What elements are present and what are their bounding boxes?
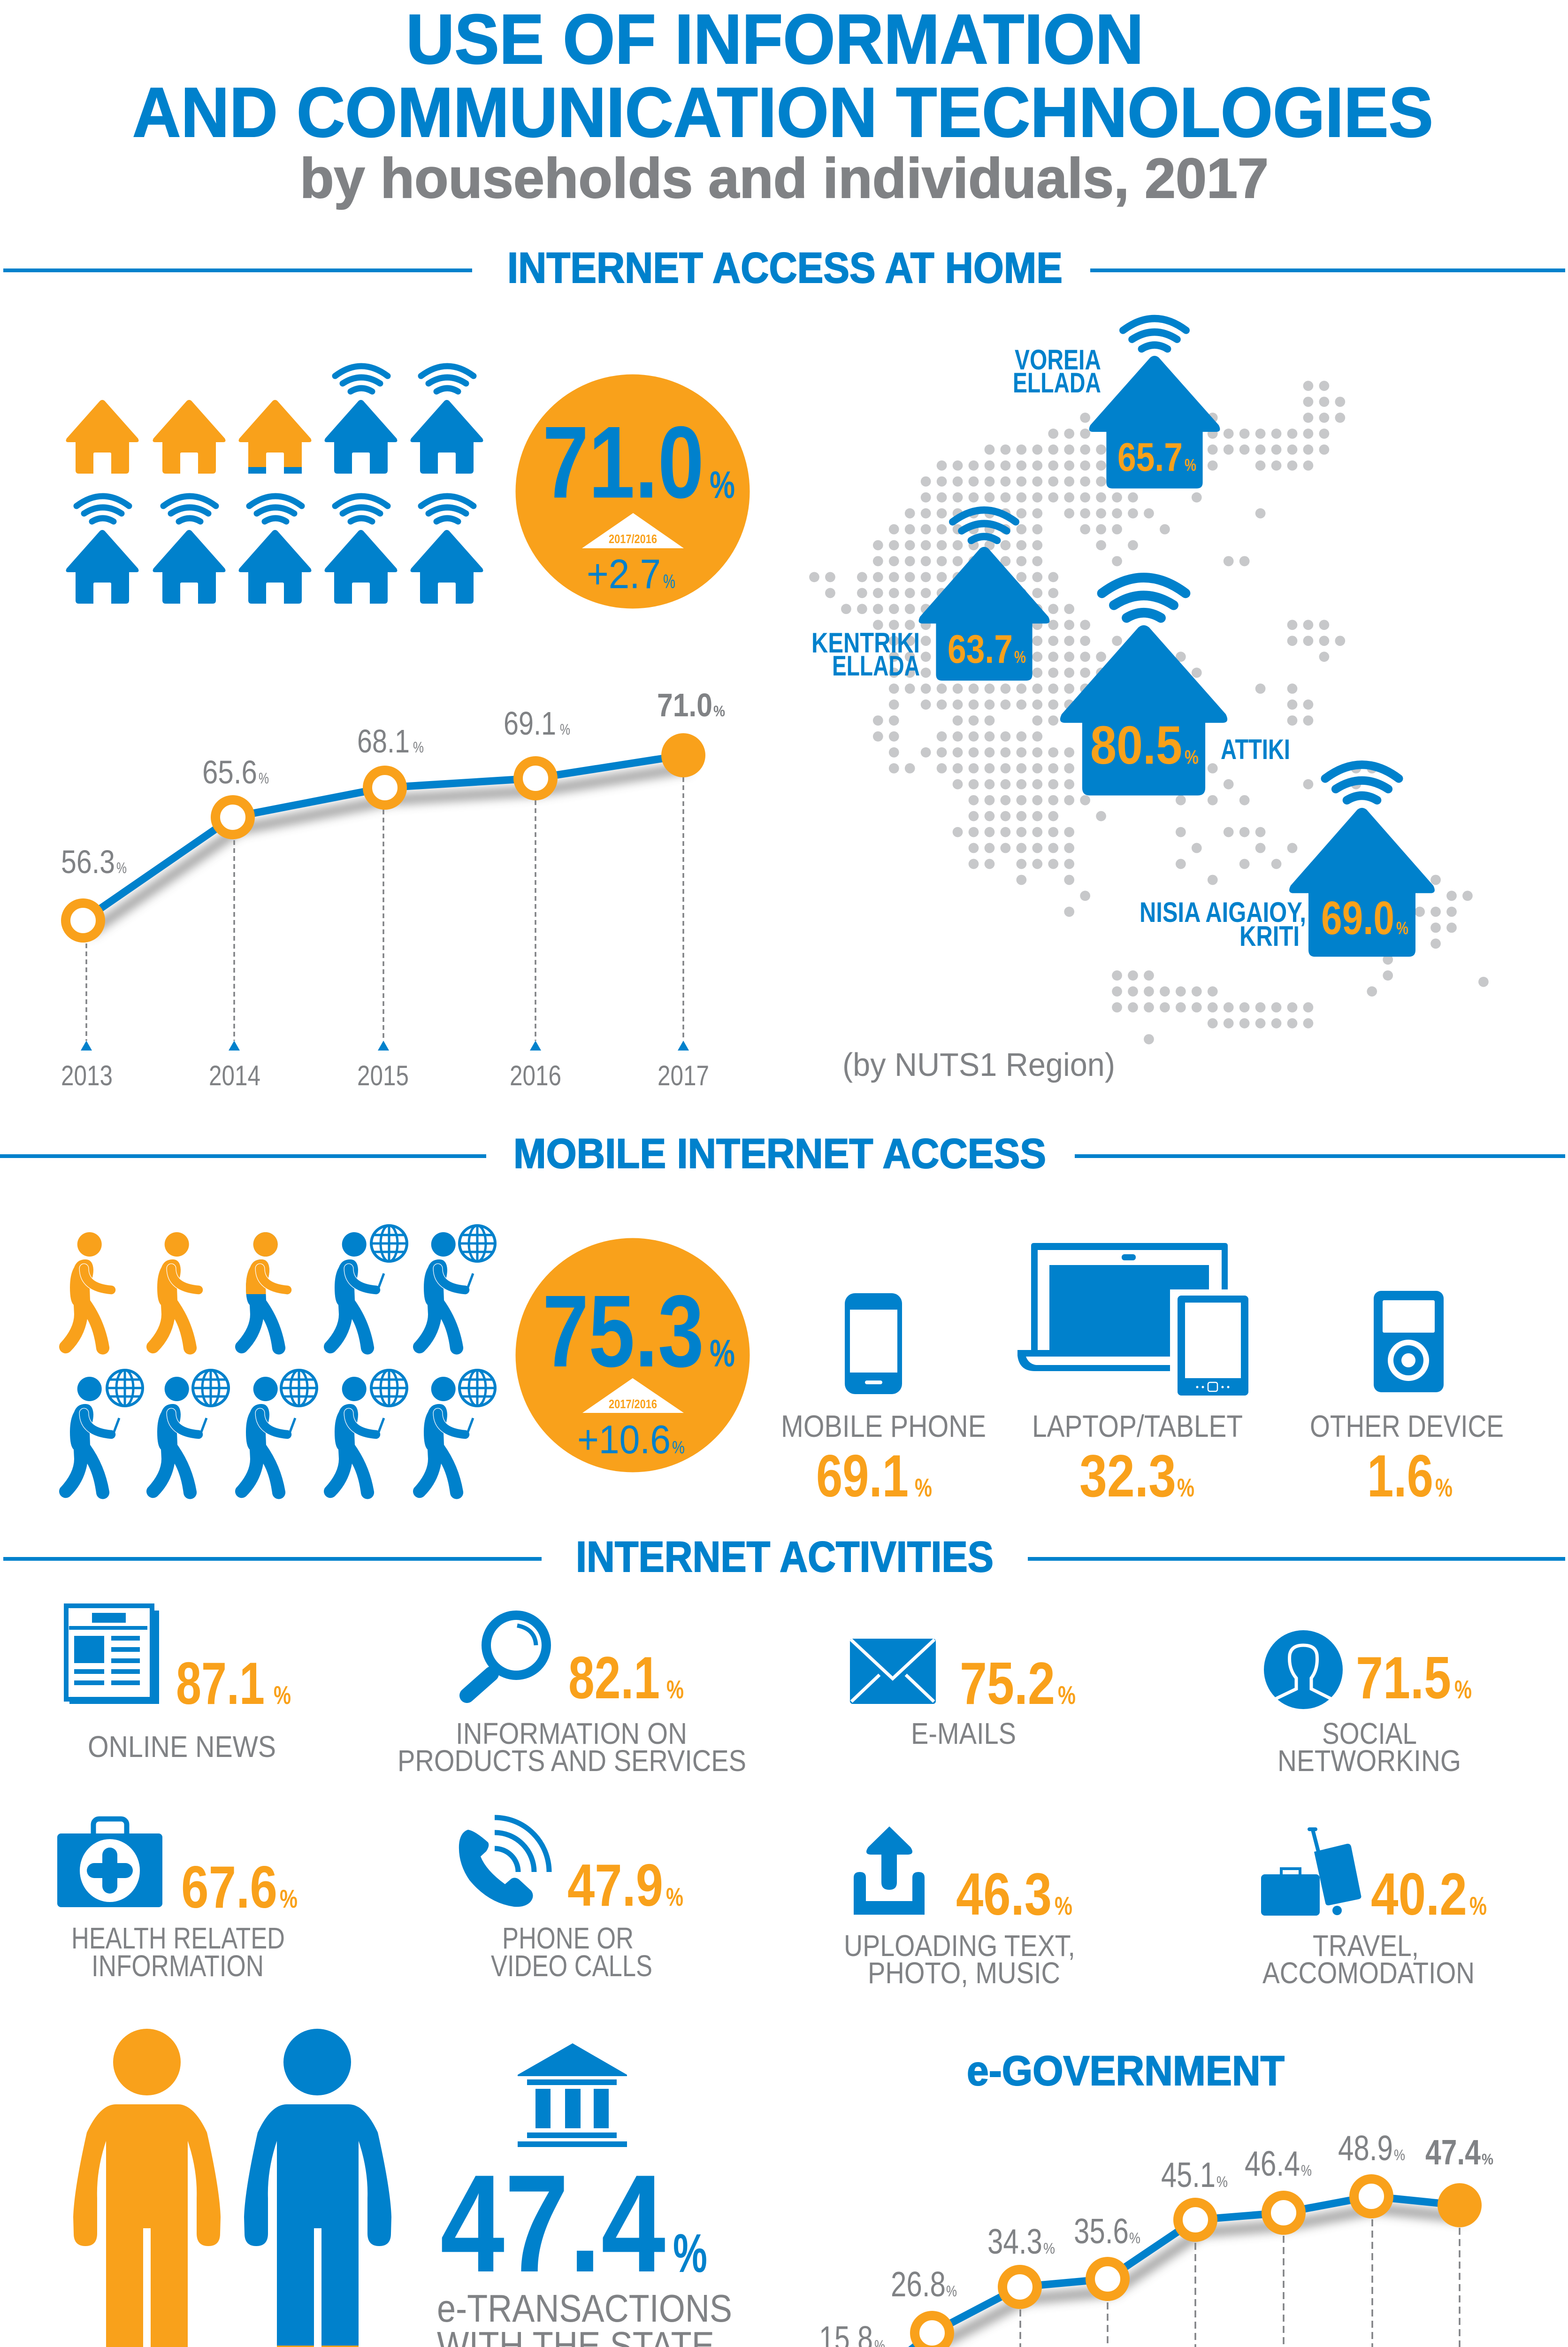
title: AND COMMUNICATION TECHNOLOGIES xyxy=(132,73,1433,152)
line chart: internet access 2013-2017: 68.1 xyxy=(357,723,410,759)
section heading: mobile internet access xyxy=(0,1130,1565,1177)
line chart: internet access 2013-2017 xyxy=(61,687,725,1091)
activity: information on products and services: PRODUCTS AND SERVICES xyxy=(398,1744,746,1778)
line chart: internet access 2013-2017: % xyxy=(713,703,725,720)
device: other device xyxy=(1310,1291,1504,1509)
callout: 71.0%: 2017/2016 xyxy=(609,532,657,546)
region: Nisia Aigaioy, Kriti: 69.0 xyxy=(1321,892,1394,944)
activity: information on products and services: % xyxy=(666,1675,684,1704)
activity: information on products and services: INFORMATION ON xyxy=(456,1717,687,1750)
line chart: internet access 2013-2017: 2016 xyxy=(510,1060,561,1091)
line chart: e-government 2010-2017 xyxy=(819,2128,1493,2347)
region: Kentriki Ellada: ELLADA xyxy=(832,650,920,682)
activity: online news: ONLINE NEWS xyxy=(88,1730,276,1764)
device: other device: 1.6 xyxy=(1367,1442,1433,1509)
line chart: internet access 2013-2017: 69.1 xyxy=(504,705,556,742)
line chart: internet access 2013-2017: 2013 xyxy=(61,1060,113,1091)
line chart: e-government 2010-2017: 48.9 xyxy=(1338,2128,1393,2168)
activity: uploading xyxy=(844,1826,1075,1990)
activity: phone or video calls: 47.9 xyxy=(567,1852,663,1918)
activity: travel, accommodation: % xyxy=(1469,1891,1487,1920)
region: Nisia Aigaioy, Kriti: % xyxy=(1396,919,1408,938)
device: laptop and tablet: LAPTOP/TABLET xyxy=(1032,1409,1243,1443)
region: Voreia Ellada xyxy=(1013,319,1220,489)
pictogram: two people, e-transactions share xyxy=(73,2029,391,2347)
pictogram: ten houses, seven connected xyxy=(66,366,483,604)
activity: e-mails: E-MAILS xyxy=(911,1717,1016,1750)
region: Voreia Ellada: VOREIA xyxy=(1015,344,1101,376)
callout: 71.0% xyxy=(515,375,750,608)
callout: 75.3%: % xyxy=(710,1332,735,1375)
region: Voreia Ellada: % xyxy=(1185,455,1196,475)
activity: travel, accommodation: 40.2 xyxy=(1371,1861,1467,1927)
activity: health related information: % xyxy=(280,1884,298,1913)
callout: 75.3%: % xyxy=(672,1438,685,1457)
region: Nisia Aigaioy, Kriti: NISIA AIGAIOY, xyxy=(1140,897,1306,928)
callout: 75.3%: 75.3 xyxy=(543,1274,704,1388)
device: other device: % xyxy=(1435,1473,1453,1502)
region: Attiki xyxy=(1060,578,1290,796)
line chart: e-government 2010-2017: % xyxy=(1129,2230,1140,2247)
callout: 71.0%: +2.7 xyxy=(587,551,661,597)
activity: e-mails: % xyxy=(1058,1680,1076,1710)
region: Attiki: % xyxy=(1185,746,1199,768)
activity: information on products and services xyxy=(398,1615,746,1778)
section heading: internet activities: INTERNET ACTIVITIES xyxy=(576,1533,994,1581)
callout: 75.3%: +10.6 xyxy=(577,1418,671,1462)
e-transactions figure: 47.4 xyxy=(440,2146,666,2301)
heading: e-government: e-GOVERNMENT xyxy=(967,2047,1285,2094)
line chart: internet access 2013-2017: 2014 xyxy=(209,1060,260,1091)
line chart: e-government 2010-2017: % xyxy=(1394,2147,1405,2163)
line chart: internet access 2013-2017: % xyxy=(259,770,269,787)
line chart: internet access 2013-2017: % xyxy=(116,859,127,876)
activity: social networking: SOCIAL xyxy=(1322,1717,1417,1750)
line chart: internet access 2013-2017: 2015 xyxy=(357,1060,409,1091)
region: Attiki: 80.5 xyxy=(1090,715,1182,775)
activity: social networking: NETWORKING xyxy=(1277,1744,1461,1778)
region: Attiki: ATTIKI xyxy=(1221,734,1290,765)
activity: online news xyxy=(66,1606,291,1764)
title xyxy=(132,0,1433,210)
device: laptop and tablet: 32.3 xyxy=(1079,1442,1176,1509)
section heading: internet access at home: INTERNET ACCESS AT HOME xyxy=(507,244,1063,292)
region: Kentriki Ellada: KENTRIKI xyxy=(811,627,920,659)
line chart: e-government 2010-2017: % xyxy=(1043,2240,1055,2257)
activity: e-mails xyxy=(850,1639,1076,1750)
line chart: internet access 2013-2017: 2017 xyxy=(658,1060,709,1091)
line chart: e-government 2010-2017: % xyxy=(1301,2162,1312,2179)
e-transactions figure: e-TRANSACTIONS xyxy=(437,2286,732,2330)
line chart: e-government 2010-2017: 47.4 xyxy=(1425,2132,1481,2172)
section heading: internet activities xyxy=(3,1533,1565,1581)
line chart: e-government 2010-2017: 35.6 xyxy=(1074,2211,1129,2251)
section heading: internet access at home xyxy=(3,244,1565,292)
region: Nisia Aigaioy, Kriti: KRITI xyxy=(1239,920,1300,952)
line chart: internet access 2013-2017: % xyxy=(413,739,424,756)
activity: uploading: PHOTO, MUSIC xyxy=(868,1956,1060,1990)
device: laptop and tablet xyxy=(1017,1243,1252,1509)
device: other device: OTHER DEVICE xyxy=(1310,1409,1504,1443)
activity: e-mails: 75.2 xyxy=(960,1650,1055,1717)
icon: state building xyxy=(518,2043,627,2147)
region: Kentriki Ellada xyxy=(811,510,1049,682)
line chart: internet access 2013-2017: 71.0 xyxy=(657,687,712,723)
line chart: e-government 2010-2017: % xyxy=(1216,2173,1228,2190)
dot map of Greece xyxy=(814,386,1484,1039)
e-transactions figure: % xyxy=(673,2223,707,2284)
line chart: e-government 2010-2017: 34.3 xyxy=(987,2222,1042,2261)
section heading: mobile internet access: MOBILE INTERNET ACCESS xyxy=(513,1130,1046,1177)
line chart: e-government 2010-2017: 46.4 xyxy=(1245,2144,1300,2183)
device: mobile phone: % xyxy=(915,1473,932,1502)
region: Nisia Aigaioy, Kriti xyxy=(1140,765,1435,957)
activity: online news: 87.1 xyxy=(176,1650,265,1717)
device: mobile phone xyxy=(781,1293,986,1509)
region: Kentriki Ellada: 63.7 xyxy=(948,627,1013,672)
region: Kentriki Ellada: % xyxy=(1014,647,1026,667)
line chart: e-government 2010-2017: % xyxy=(946,2283,957,2300)
activity: health related information: 67.6 xyxy=(181,1854,277,1920)
activity: online news: % xyxy=(274,1680,291,1710)
line chart: internet access 2013-2017: 56.3 xyxy=(61,844,115,880)
title: USE OF INFORMATION xyxy=(406,0,1144,78)
line chart: e-government 2010-2017: % xyxy=(1482,2151,1493,2168)
callout: 75.3%: 2017/2016 xyxy=(609,1397,657,1411)
activity: uploading: 46.3 xyxy=(956,1861,1052,1927)
region: Voreia Ellada: ELLADA xyxy=(1013,367,1101,399)
activity: health related information: INFORMATION xyxy=(92,1949,264,1983)
activity: phone or video calls: PHONE OR xyxy=(502,1921,634,1955)
line chart: internet access 2013-2017: % xyxy=(560,721,570,738)
map note: (by NUTS1 Region) xyxy=(842,1046,1115,1083)
activity: social networking: % xyxy=(1454,1675,1472,1704)
activity: travel, accommodation: TRAVEL, xyxy=(1313,1929,1419,1963)
activity: phone or video calls: VIDEO CALLS xyxy=(491,1949,652,1983)
region: Voreia Ellada: 65.7 xyxy=(1117,435,1183,480)
line chart: e-government 2010-2017: 26.8 xyxy=(891,2264,946,2304)
activity: health related information xyxy=(57,1819,298,1983)
activity: social networking xyxy=(1264,1630,1472,1778)
callout: 71.0%: % xyxy=(663,570,675,592)
callout: 71.0%: 71.0 xyxy=(543,406,704,520)
activity: uploading: UPLOADING TEXT, xyxy=(844,1929,1075,1963)
activity: travel, accommodation: ACCOMODATION xyxy=(1262,1956,1475,1990)
title: by households and individuals, 2017 xyxy=(300,147,1269,210)
activity: uploading: % xyxy=(1055,1891,1072,1920)
device: mobile phone: 69.1 xyxy=(816,1442,909,1509)
activity: information on products and services: 82.1 xyxy=(568,1644,660,1711)
activity: social networking: 71.5 xyxy=(1356,1644,1451,1711)
activity: phone or video calls xyxy=(459,1818,683,1983)
callout: 71.0%: % xyxy=(710,464,735,506)
callout: 75.3% xyxy=(515,1238,750,1472)
device: laptop and tablet: % xyxy=(1177,1473,1194,1502)
line chart: internet access 2013-2017: 65.6 xyxy=(202,754,257,790)
activity: phone or video calls: % xyxy=(666,1882,683,1911)
activity: travel, accommodation xyxy=(1261,1829,1487,1990)
device: mobile phone: MOBILE PHONE xyxy=(781,1409,986,1443)
activity: health related information: HEALTH RELATED xyxy=(71,1921,285,1955)
pictogram: ten walking people, mobile users xyxy=(59,1226,495,1499)
line chart: e-government 2010-2017: 45.1 xyxy=(1161,2155,1216,2194)
